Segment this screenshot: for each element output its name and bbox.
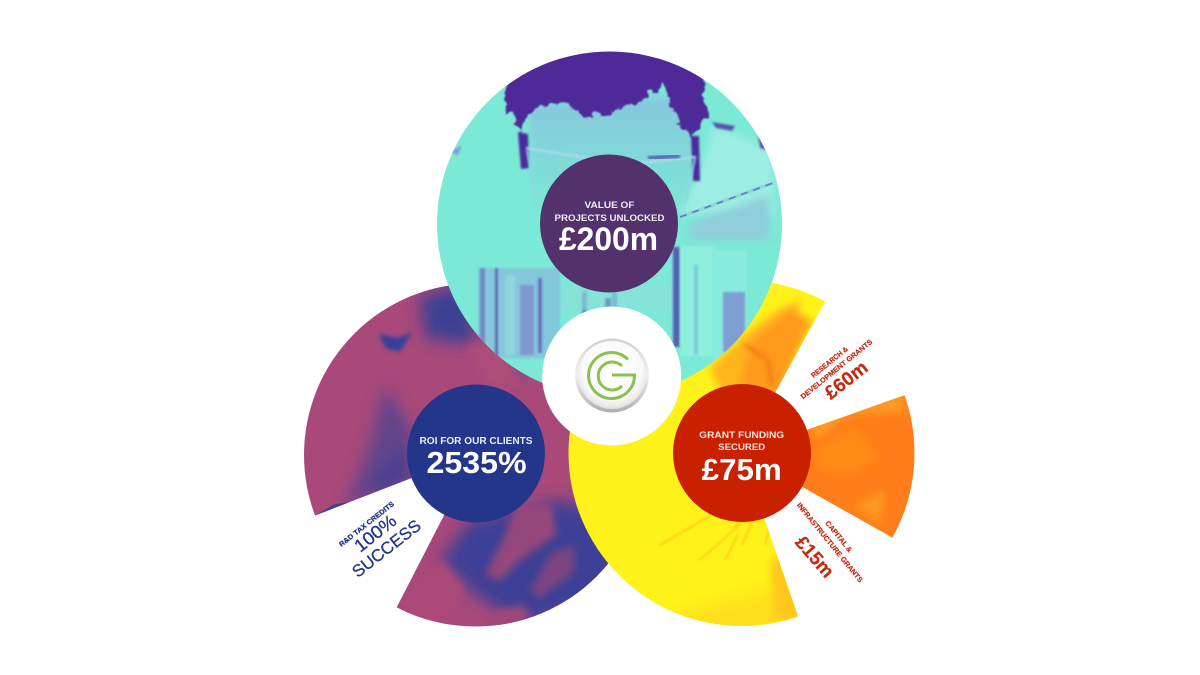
panel: grant funding circle with orange photo [560, 275, 920, 640]
text block: research and development grants: £60m [821, 357, 872, 404]
icon: GC logo [575, 338, 649, 412]
callout: grant funding secured [673, 384, 811, 522]
text block: research and development grants: DEVELOPMENT GRANTS [799, 337, 874, 401]
text block: R&D tax credits: 100% [350, 511, 400, 556]
goggles [526, 148, 696, 163]
callout: ROI for clients: ROI FOR OUR CLIENTS [420, 436, 533, 447]
text block: capital and infrastructure grants: CAPITAL & [823, 519, 854, 554]
panel: ROI circle with hand photo [300, 280, 625, 630]
text block: R&D tax credits: SUCCESS [348, 516, 425, 581]
panel: logo disc [542, 306, 681, 446]
callout: value of projects: £200m [559, 221, 658, 257]
test tubes [478, 268, 678, 358]
infographic [304, 52, 914, 626]
callout: ROI for clients: 2535% [426, 445, 526, 480]
callout: value of projects [540, 154, 678, 292]
text block: capital and infrastructure grants: £15m [790, 532, 838, 582]
callout: value of projects: VALUE OF [584, 200, 635, 211]
callout: ROI for clients [407, 384, 545, 522]
face [527, 94, 695, 186]
text block: capital and infrastructure grants: INFRASTRUCTURE GRANTS [795, 501, 865, 584]
callout: grant funding secured: GRANT FUNDING [699, 430, 784, 441]
panel: value of projects circle with scientist photo [437, 52, 782, 383]
callout: grant funding secured: SECURED [718, 442, 765, 453]
text block: research and development grants: RESEARCH & [809, 344, 850, 380]
hair [506, 45, 706, 137]
pipette [680, 183, 773, 217]
callout: grant funding secured: £75m [702, 452, 782, 487]
text block: R&D tax credits: R&D TAX CREDITS [338, 501, 396, 549]
callout: value of projects: PROJECTS UNLOCKED [554, 213, 665, 224]
orange wedge [802, 395, 914, 538]
